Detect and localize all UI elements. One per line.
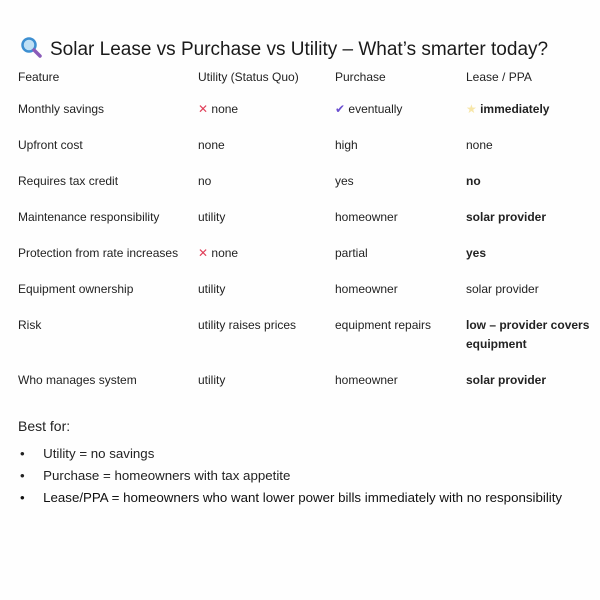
row: maintenance: Maintenance responsibility xyxy=(18,210,159,224)
row: tax credit xyxy=(18,174,481,188)
row: maintenance: homeowner xyxy=(335,210,398,224)
row: rate protection: Protection from rate increases xyxy=(18,246,178,260)
row: manages: Who manages system xyxy=(18,373,137,387)
row: monthly savings: ★ immediately xyxy=(466,102,549,116)
row: manages xyxy=(18,373,546,387)
row: monthly savings xyxy=(18,102,550,116)
row: upfront cost: none xyxy=(198,138,225,152)
row: maintenance xyxy=(18,210,546,224)
row: upfront cost: high xyxy=(335,138,358,152)
row: manages: solar provider xyxy=(466,373,546,387)
row: rate protection: partial xyxy=(335,246,368,260)
row: risk: Risk xyxy=(18,318,41,332)
row: monthly savings: ✕ none xyxy=(198,102,238,116)
row: ownership: homeowner xyxy=(335,282,398,296)
row: risk: equipment xyxy=(466,337,527,351)
row: ownership: solar provider xyxy=(466,282,539,296)
best for list: • Purchase = homeowners with tax appetite xyxy=(20,468,290,483)
row: risk: utility raises prices xyxy=(198,318,296,332)
row: maintenance: solar provider xyxy=(466,210,546,224)
row: manages: utility xyxy=(198,373,225,387)
row: risk xyxy=(18,318,589,351)
row: manages: homeowner xyxy=(335,373,398,387)
row: monthly savings: Monthly savings xyxy=(18,102,104,116)
row: upfront cost: none xyxy=(466,138,493,152)
row: upfront cost: Upfront cost xyxy=(18,138,83,152)
row: risk: low – provider covers xyxy=(466,318,589,332)
row: upfront cost xyxy=(18,138,493,152)
icon: magnifier xyxy=(21,37,42,58)
row: ownership: Equipment ownership xyxy=(18,282,133,296)
table xyxy=(18,70,589,387)
header row: Purchase xyxy=(335,70,386,84)
row: tax credit: no xyxy=(466,174,481,188)
row: maintenance: utility xyxy=(198,210,225,224)
row: rate protection: ✕ none xyxy=(198,246,238,260)
row: ownership xyxy=(18,282,539,296)
best for list: • Lease/PPA = homeowners who want lower power bills immediately with no responsibility xyxy=(20,490,562,505)
best for list xyxy=(20,446,562,505)
row: ownership: utility xyxy=(198,282,225,296)
best for list: • Utility = no savings xyxy=(20,446,154,461)
row: risk: equipment repairs xyxy=(335,318,431,332)
row: tax credit: Requires tax credit xyxy=(18,174,118,188)
row: tax credit: yes xyxy=(335,174,354,188)
header row: Utility (Status Quo) xyxy=(198,70,299,84)
title: Solar Lease vs Purchase vs Utility – What’s smarter today? xyxy=(50,39,548,60)
row: monthly savings: ✔ eventually xyxy=(335,102,402,116)
header row xyxy=(18,70,532,84)
best for heading: Best for: xyxy=(18,418,70,434)
header row: Feature xyxy=(18,70,59,84)
header row: Lease / PPA xyxy=(466,70,532,84)
row: rate protection: yes xyxy=(466,246,486,260)
row: tax credit: no xyxy=(198,174,211,188)
row: rate protection xyxy=(18,246,486,260)
